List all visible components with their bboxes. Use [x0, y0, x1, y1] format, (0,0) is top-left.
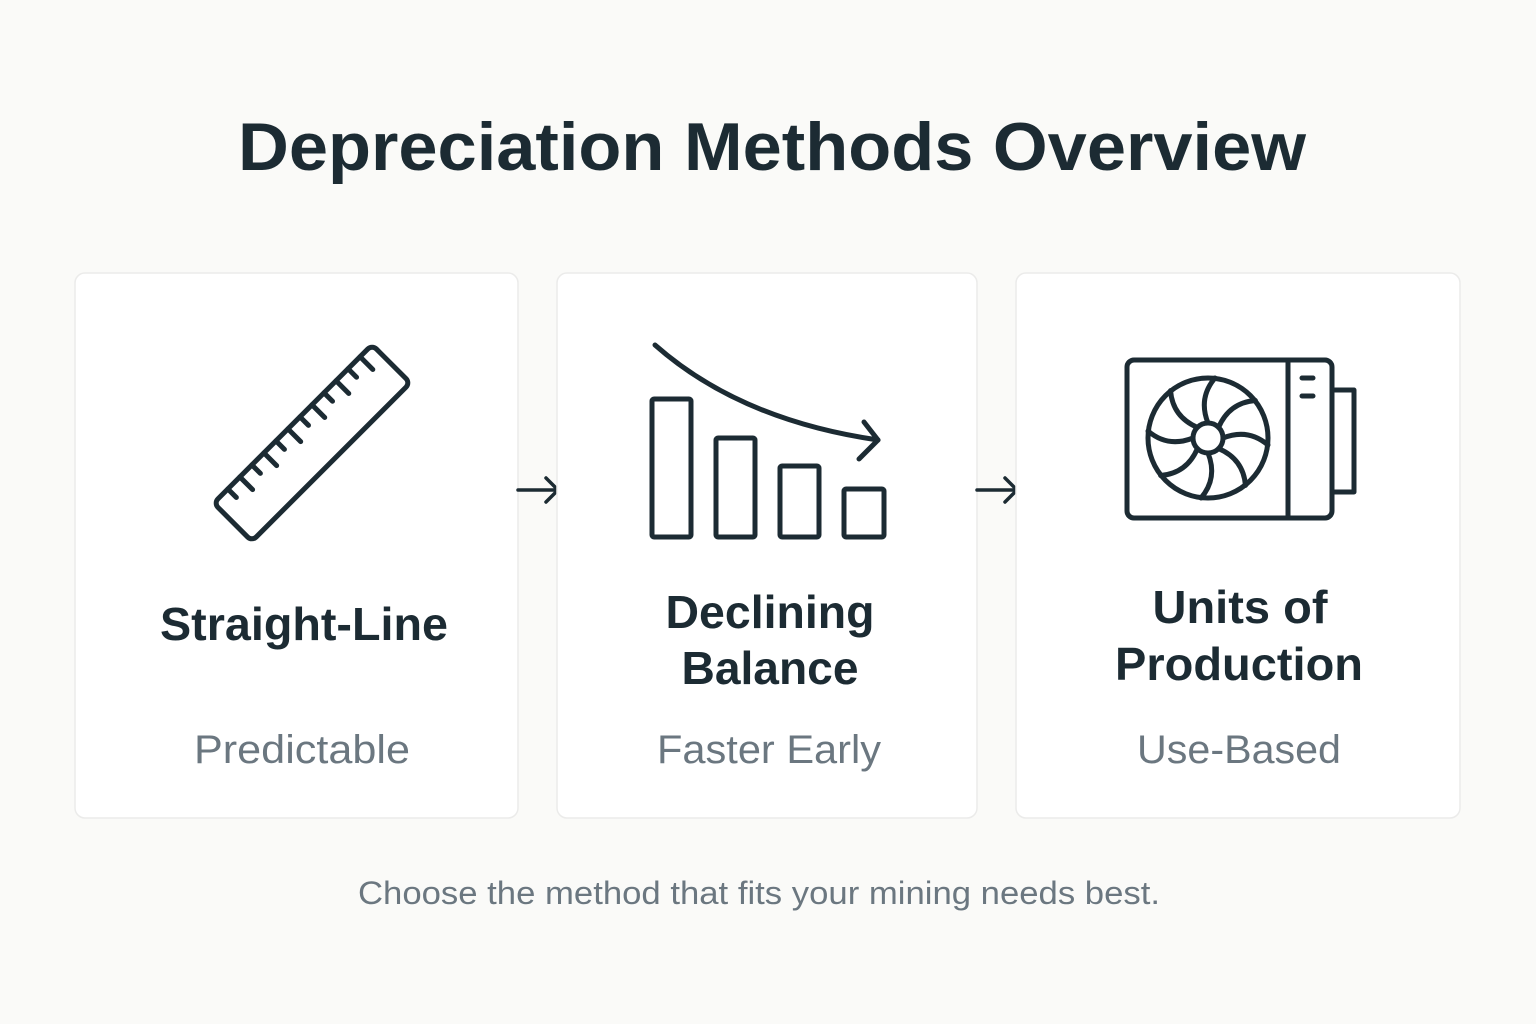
panel: straight-line [75, 273, 518, 818]
icon: mining machine fan [1127, 360, 1354, 518]
subtitle: Predictable: Predictable [194, 728, 410, 772]
heading: Straight-Line: Straight-Line [160, 598, 448, 650]
subtitle: Faster Early: Faster Early [657, 728, 881, 772]
heading: Declining Balance: Declining [666, 586, 874, 638]
arrow 2 [977, 478, 1017, 502]
panel: declining balance: Balance [682, 642, 858, 694]
subtitle: Use-Based: Use-Based [1137, 728, 1341, 772]
panel: declining balance [557, 273, 977, 818]
panel: units of production: Production [1115, 638, 1363, 690]
icon: ruler [214, 345, 410, 541]
arrow 1 [518, 478, 558, 502]
icon: declining bar chart [652, 345, 884, 537]
panel: units of production [1016, 273, 1460, 818]
title: Depreciation Methods Overview [238, 109, 1307, 185]
footer note: Choose the method that fits your mining needs best. [358, 875, 1160, 911]
heading: Units of Production: Units of [1152, 581, 1328, 633]
